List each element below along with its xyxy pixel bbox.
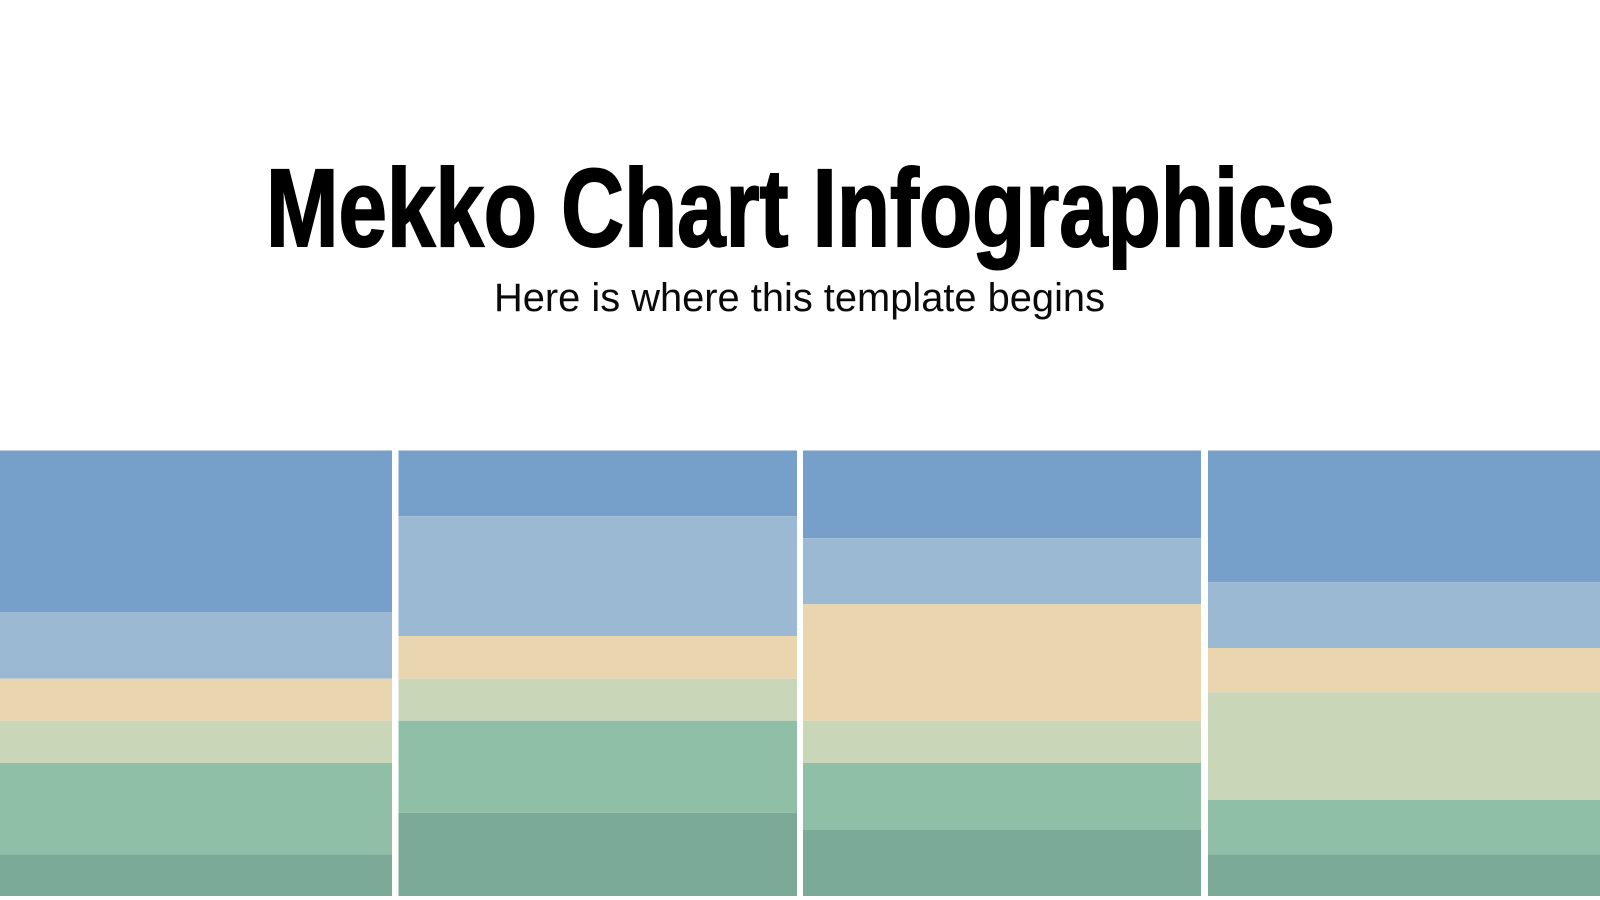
column 4 bbox=[1208, 450, 1600, 896]
subtitle: Here is where this template begins bbox=[494, 276, 1105, 320]
mekko chart bbox=[0, 450, 1600, 896]
column 2 bbox=[398, 450, 797, 896]
title: Mekko Chart Infographics bbox=[266, 147, 1335, 270]
column 3 bbox=[803, 450, 1201, 896]
column 1 bbox=[0, 450, 392, 896]
